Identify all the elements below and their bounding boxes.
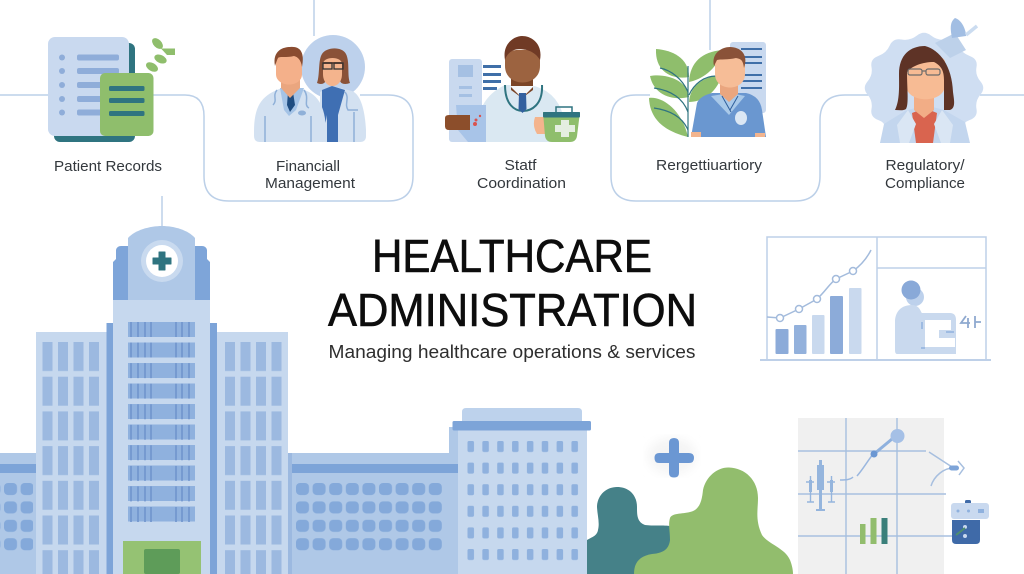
title: HEALTHCARE (372, 230, 652, 282)
title: ADMINISTRATION (328, 284, 697, 336)
low building left (0, 453, 36, 574)
bar chart (776, 288, 862, 354)
bush: green (634, 467, 793, 574)
icon: staff coordination (445, 36, 580, 142)
icon: person at desk (895, 280, 981, 354)
label: regulatory: Rergettiuartiory (656, 158, 763, 174)
left wing (36, 332, 107, 574)
subtitle: Managing healthcare operations & services (328, 342, 696, 362)
small bar chart (860, 518, 888, 544)
icon: regulatory compliance person (865, 18, 983, 143)
icon: network curve (840, 429, 964, 486)
panel: analytics chart (760, 237, 991, 360)
annex building (452, 408, 591, 574)
icon: regulatory nurse with plant (649, 42, 766, 137)
panel: map grid (798, 418, 989, 574)
label: staff coordination: Statf (504, 158, 538, 174)
icon: patient records (48, 36, 175, 142)
low building right (288, 427, 458, 574)
right wing (217, 332, 292, 574)
icon: syringes (806, 460, 835, 510)
hospital illustration (0, 226, 591, 574)
icon: floating plus (648, 438, 696, 478)
bush: teal (587, 487, 680, 574)
title (328, 230, 697, 336)
label: staff coordination: Coordination (477, 176, 566, 192)
label: financial management: Management (265, 176, 355, 192)
label: regulatory compliance: Regulatory/ (886, 158, 966, 174)
label: regulatory compliance: Compliance (885, 176, 965, 192)
connector lines (0, 0, 1024, 226)
icon: device (951, 500, 989, 544)
label: financial management: Financiall (276, 159, 340, 175)
hospital emblem (141, 240, 183, 282)
trend line (767, 250, 871, 322)
label: patient records: Patient Records (54, 159, 162, 175)
central tower (106, 226, 217, 574)
entrance (123, 541, 201, 574)
icon: financial management staff (254, 35, 366, 142)
